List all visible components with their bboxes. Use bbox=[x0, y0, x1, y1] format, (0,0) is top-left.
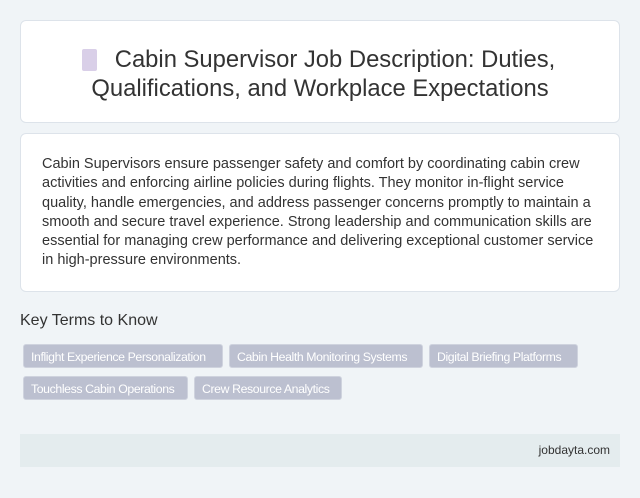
tags: Inflight Experience Personalization bbox=[31, 350, 206, 364]
icon: document bbox=[82, 49, 97, 71]
title bbox=[91, 46, 555, 102]
tags: Cabin Health Monitoring Systems bbox=[237, 350, 407, 364]
tags: Digital Briefing Platforms bbox=[437, 350, 561, 364]
tags: Crew Resource Analytics bbox=[202, 382, 329, 396]
title card bbox=[20, 20, 620, 123]
tags: Touchless Cabin Operations bbox=[31, 382, 174, 396]
description card bbox=[20, 133, 620, 292]
footer bbox=[20, 434, 620, 467]
title: Qualifications, and Workplace Expectations bbox=[91, 75, 549, 102]
title: Cabin Supervisor Job Description: Duties, bbox=[115, 46, 555, 73]
description text: Cabin Supervisors ensure passenger safety and comfort by coordinating cabin crew activities and enforcing airline policies during flights. They monitor in-flight service quality, handle emergencies, and address passenger concerns promptly to maintain a smooth and secure travel experience. Strong leadership and communication skills are essential for managing crew performance and delivering exceptional customer service in high-pressure environments. bbox=[42, 156, 593, 268]
footer source: jobdayta.com bbox=[539, 443, 610, 457]
key terms heading: Key Terms to Know bbox=[20, 312, 158, 329]
